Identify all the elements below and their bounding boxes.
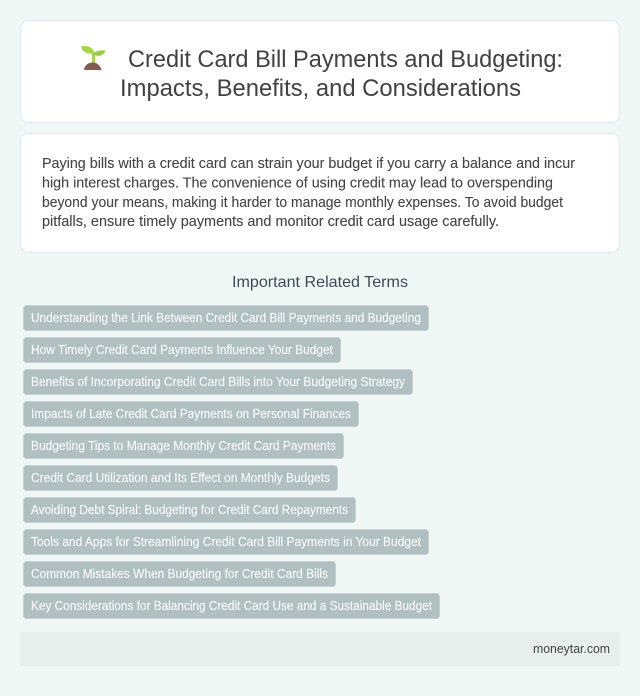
tag: benefits: Benefits of Incorporating Credit Card Bills into Your Budgeting Strategy [31, 374, 405, 389]
text block: summary: Paying bills with a credit card can strain your budget if you carry a balance and incur [42, 155, 575, 172]
tag: tools and apps: Tools and Apps for Streamlining Credit Card Bill Payments in Your Budget [31, 534, 421, 549]
tag: timely payments: How Timely Credit Card Payments Influence Your Budget [31, 342, 333, 357]
tag: late payments: Impacts of Late Credit Card Payments on Personal Finances [31, 406, 351, 421]
tag: understanding the link: Understanding the Link Between Credit Card Bill Payments and Budgeting [31, 310, 421, 325]
tag: utilization [24, 466, 338, 490]
icon: sprout [81, 46, 106, 70]
tag: understanding the link [24, 306, 428, 330]
footer source: moneytar.com [533, 642, 610, 656]
text block: summary: high interest charges. The convenience of using credit may lead to overspending [42, 174, 553, 192]
tag: benefits [24, 370, 412, 394]
tag: debt spiral [24, 498, 356, 522]
footer [20, 632, 620, 666]
tag: key considerations: Key Considerations for Balancing Credit Card Use and a Sustainable Budget [31, 598, 432, 613]
panel: title card [20, 20, 620, 122]
title [120, 46, 563, 102]
tag: late payments [24, 402, 358, 426]
tag: budgeting tips: Budgeting Tips to Manage Monthly Credit Card Payments [31, 438, 336, 453]
title: Credit Card Bill Payments and Budgeting: [128, 46, 563, 73]
text block: summary: beyond your means, making it harder to manage monthly expenses. To avoid budget [42, 194, 564, 211]
tag: tools and apps [24, 530, 428, 554]
tag: key considerations [24, 594, 440, 618]
text block: summary [42, 155, 575, 230]
heading: related terms: Important Related Terms [232, 274, 408, 291]
tag: debt spiral: Avoiding Debt Spiral: Budgeting for Credit Card Repayments [31, 502, 348, 517]
tag: common mistakes [24, 562, 336, 586]
text block: summary: pitfalls, ensure timely payments and monitor credit card usage carefully. [42, 213, 499, 230]
panel: summary paragraph [20, 134, 620, 252]
tag: timely payments [24, 338, 340, 362]
list: related term tags [24, 306, 440, 618]
tag: common mistakes: Common Mistakes When Budgeting for Credit Card Bills [31, 566, 328, 581]
title: Impacts, Benefits, and Considerations [120, 75, 521, 102]
tag: utilization: Credit Card Utilization and Its Effect on Monthly Budgets [31, 470, 330, 485]
tag: budgeting tips [24, 434, 344, 458]
